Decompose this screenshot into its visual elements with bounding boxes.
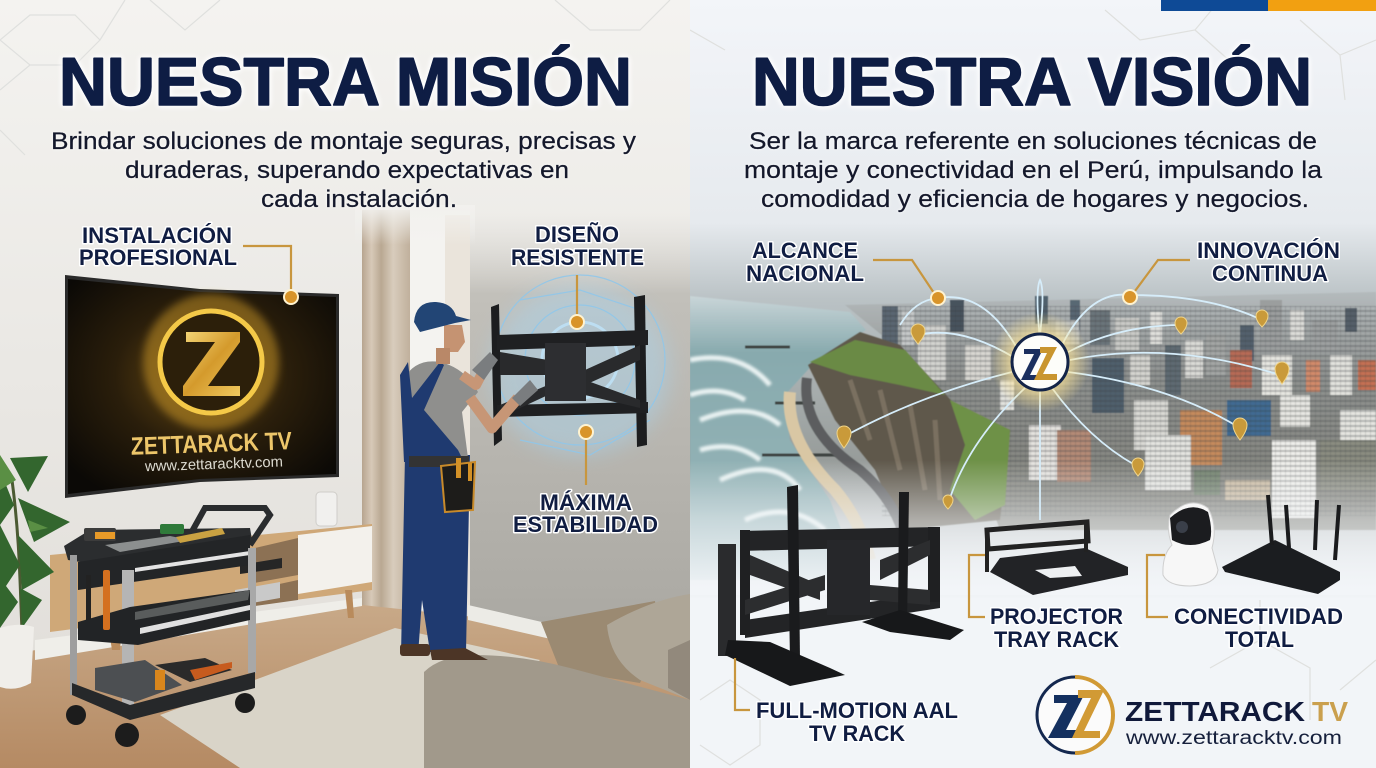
- router: [1222, 495, 1340, 594]
- plant: [0, 455, 70, 689]
- tv: [65, 275, 339, 498]
- media console: [50, 524, 372, 650]
- tool cart: [64, 508, 270, 747]
- label: conectividad: [1147, 555, 1343, 652]
- panel: misión: [0, 0, 690, 768]
- torso: [403, 361, 478, 458]
- panel: visión: [690, 0, 1376, 768]
- vision text: comodidad y eficiencia de hogares y negocios.: [761, 186, 1309, 213]
- tv brand: ZETTARACK TV: [130, 427, 293, 461]
- coast cliffs: [790, 332, 1010, 560]
- mission text: [53, 131, 636, 208]
- sky background: [690, 0, 1376, 768]
- network arcs: [845, 280, 1280, 520]
- label: projector tray: [969, 555, 1123, 652]
- logo emblem: [1037, 677, 1113, 753]
- callout: innovación continua: CONTINUA: [1212, 261, 1328, 286]
- callout: instalación profesional: PROFESIONAL: [79, 245, 237, 270]
- label: conectividad: CONECTIVIDAD: [1174, 604, 1343, 629]
- vision text: Ser la marca referente en soluciones técnicas de: [749, 128, 1317, 155]
- callout: alcance nacional: ALCANCE: [752, 238, 858, 263]
- callout: instalación profesional: INSTALACIÓN: [82, 223, 232, 248]
- logo url: www.zettaracktv.com: [1125, 728, 1342, 749]
- logo tv: TV: [1312, 696, 1348, 727]
- callout: innovación continua: [1123, 238, 1340, 304]
- smart speaker: [316, 492, 337, 526]
- wall mount: [491, 295, 648, 447]
- tv logo z: [183, 332, 240, 396]
- label: full-motion: FULL-MOTION AAL: [756, 698, 958, 723]
- arms: [462, 364, 487, 385]
- label: full-motion: TV RACK: [809, 721, 905, 746]
- room background: [0, 0, 690, 768]
- mission text: Brindar soluciones de montaje seguras, precisas y: [51, 128, 636, 155]
- vision text: [744, 128, 1323, 213]
- full-motion rack: [718, 485, 964, 686]
- wall mount hologram: [490, 275, 670, 455]
- callout: diseño resistente: DISEÑO: [535, 222, 619, 247]
- callout: diseño resistente: [511, 222, 644, 329]
- label: full-motion: [735, 658, 958, 746]
- overall bib: [400, 362, 464, 462]
- callout: alcance nacional: NACIONAL: [746, 261, 864, 286]
- security camera: [1163, 503, 1218, 586]
- label: projector tray: TRAY RACK: [994, 627, 1119, 652]
- callout: diseño resistente: RESISTENTE: [511, 245, 644, 270]
- tv url: www.zettaracktv.com: [144, 453, 283, 475]
- belt: [409, 456, 469, 467]
- hub logo: [990, 312, 1090, 412]
- label: conectividad: TOTAL: [1225, 627, 1294, 652]
- callout: instalación profesional: [79, 223, 298, 304]
- title: nuestra misión: NUESTRA MISIÓN: [59, 44, 632, 120]
- technician: [400, 302, 538, 660]
- tool pouch: [441, 458, 475, 512]
- cap: [414, 302, 471, 332]
- brand logo: [1037, 677, 1348, 753]
- city skyline: [845, 292, 1376, 530]
- hex pattern: [690, 0, 1376, 765]
- sofa: [424, 594, 690, 768]
- mission text: duraderas, superando expectativas en: [125, 157, 569, 184]
- callout: máxima estabilidad: [513, 425, 658, 537]
- legs: [401, 455, 470, 655]
- cart tools: [84, 524, 225, 552]
- mission text: cada instalación.: [261, 186, 457, 213]
- vision text: montaje y conectividad en el Perú, impulsando la: [744, 157, 1323, 184]
- fade to white: [690, 465, 1376, 586]
- tv logo ring: [160, 311, 262, 413]
- callout: innovación continua: INNOVACIÓN: [1197, 238, 1340, 263]
- callout: máxima estabilidad: MÁXIMA: [540, 490, 632, 515]
- location pins: [837, 310, 1289, 509]
- sea: [690, 296, 866, 580]
- title: nuestra visión: NUESTRA VISIÓN: [752, 44, 1312, 120]
- projector tray: [987, 522, 1128, 595]
- callout: máxima estabilidad: ESTABILIDAD: [513, 512, 658, 537]
- callout: alcance nacional: [746, 238, 945, 305]
- logo wordmark: ZETTARACK: [1125, 696, 1305, 727]
- label: projector tray: PROJECTOR: [990, 604, 1123, 629]
- head: [444, 325, 465, 352]
- accent bar: [1161, 0, 1376, 11]
